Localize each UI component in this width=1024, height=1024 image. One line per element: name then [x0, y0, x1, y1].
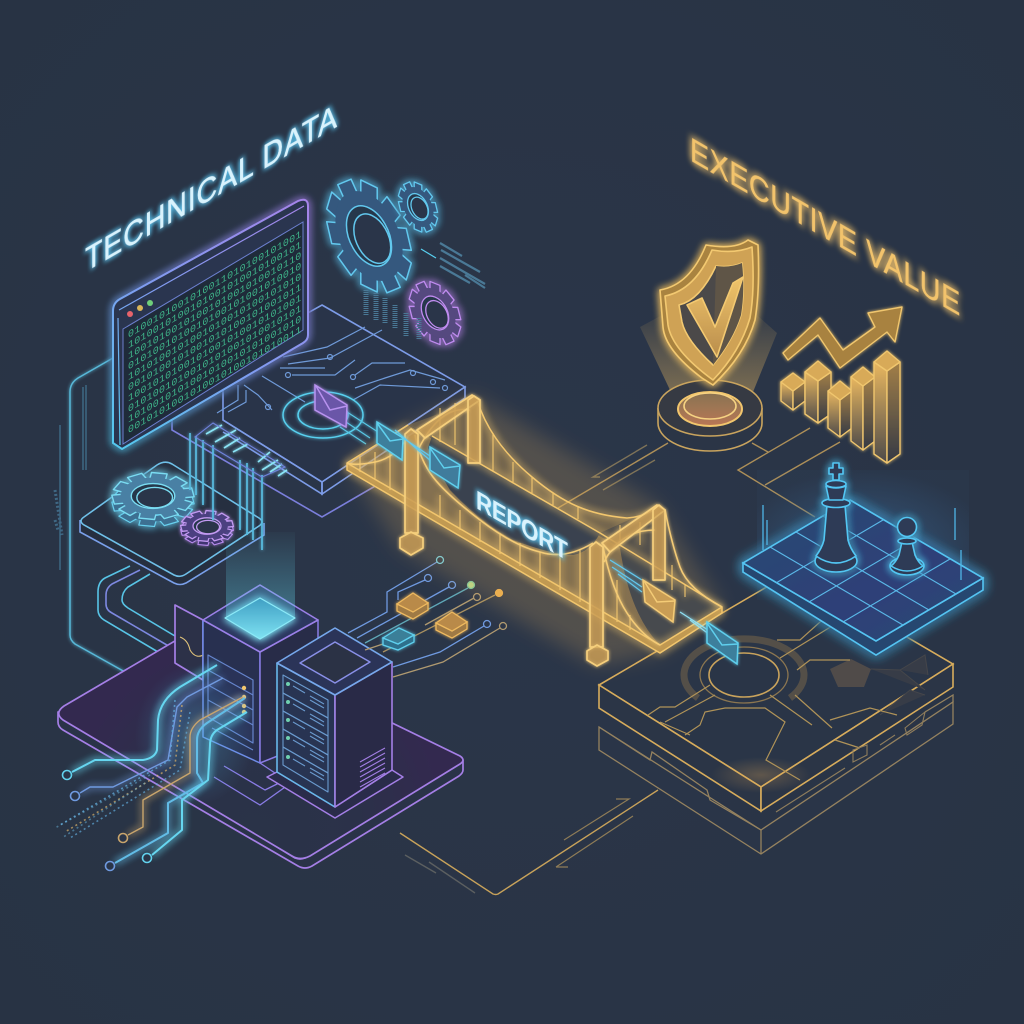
bridge towers	[400, 395, 665, 666]
icon: envelope left	[377, 422, 403, 460]
icon: orange chip two	[436, 612, 467, 638]
binary text: 0010100101001010100101001011	[128, 282, 301, 395]
bar 5	[874, 351, 900, 463]
icon: envelope on deck	[430, 447, 460, 488]
window buttons	[127, 300, 153, 317]
cables between gear board and server	[98, 566, 175, 662]
data stream bits	[55, 700, 190, 838]
vent lines	[360, 748, 385, 787]
king piece	[815, 463, 857, 572]
panel: executive circuit board	[599, 571, 953, 854]
icon: large blue gear	[327, 163, 411, 309]
binary text	[128, 229, 301, 437]
glowing top square	[225, 598, 295, 639]
binary text: 1010010100101001010010100101	[128, 240, 301, 352]
bridge deck fills	[347, 400, 722, 653]
pawn piece	[890, 518, 924, 575]
icon: shield on pedestal	[640, 240, 777, 451]
icon: flat purple gear	[170, 504, 244, 552]
title: technical data: TECHNICAL DATA	[85, 96, 337, 279]
icon: purple gear	[409, 273, 461, 353]
shield	[660, 240, 759, 385]
bridge aura	[347, 395, 722, 666]
bar chart with rising arrow	[781, 307, 902, 463]
icon: orange chip	[397, 593, 428, 619]
icon: small blue gear	[398, 175, 438, 239]
banner label: REPORT	[476, 484, 568, 567]
icon: blue chip	[383, 628, 414, 650]
suspension cables	[347, 410, 722, 645]
icon: envelope right	[707, 622, 738, 664]
panel: server platform	[58, 605, 463, 868]
panel: lower-left gear board	[80, 462, 264, 584]
bar 3	[828, 381, 852, 437]
bar 4	[851, 367, 875, 450]
binary text: 0101001010010100101001010010	[128, 261, 301, 373]
chess board	[743, 500, 983, 655]
icon: flat blue gear	[96, 463, 210, 536]
binary text: 1001010100101001010010101001	[128, 293, 301, 405]
back server tower	[203, 532, 318, 805]
rack slots	[283, 675, 328, 792]
binary text: 0100101001010011010100101001	[128, 229, 301, 342]
chess hologram	[743, 463, 983, 655]
cable end nodes	[62, 770, 152, 870]
output wires with nodes	[348, 556, 506, 677]
connector arrows: report to technical	[400, 790, 658, 894]
mini data bars and code lines	[366, 243, 485, 340]
icon: purple envelope	[315, 385, 347, 427]
bridge deck lines	[347, 400, 722, 653]
trend arrow	[783, 307, 902, 368]
title: executive value: EXECUTIVE VALUE	[690, 130, 960, 323]
monitor with binary code	[113, 200, 308, 449]
binary text: 0101001010010101001010010101	[128, 303, 301, 416]
binary text: 1010010101001010010101001010	[128, 314, 301, 426]
front server rack	[267, 628, 403, 818]
left riser wire	[55, 358, 125, 672]
binary text: 1001010010100101001010010110	[128, 250, 301, 363]
rack face	[208, 655, 253, 750]
data cables from server	[72, 665, 247, 863]
bar 1	[781, 373, 805, 410]
panel: upper circuit board	[172, 305, 465, 517]
binary text: 0010101001010010100101010011	[128, 325, 301, 437]
bridge with report banner	[347, 395, 738, 666]
connector lines: shield to bridge and chess	[558, 428, 840, 517]
pedestal	[658, 380, 762, 451]
cable glow	[135, 665, 255, 805]
light trails	[395, 430, 710, 635]
ribbon connector	[190, 423, 287, 550]
signal ring	[283, 392, 378, 444]
bar 2	[805, 361, 831, 423]
circuit traces	[217, 327, 448, 413]
icon: gold envelope	[643, 580, 675, 622]
binary text: 1010100101001010010100101010	[128, 272, 301, 384]
